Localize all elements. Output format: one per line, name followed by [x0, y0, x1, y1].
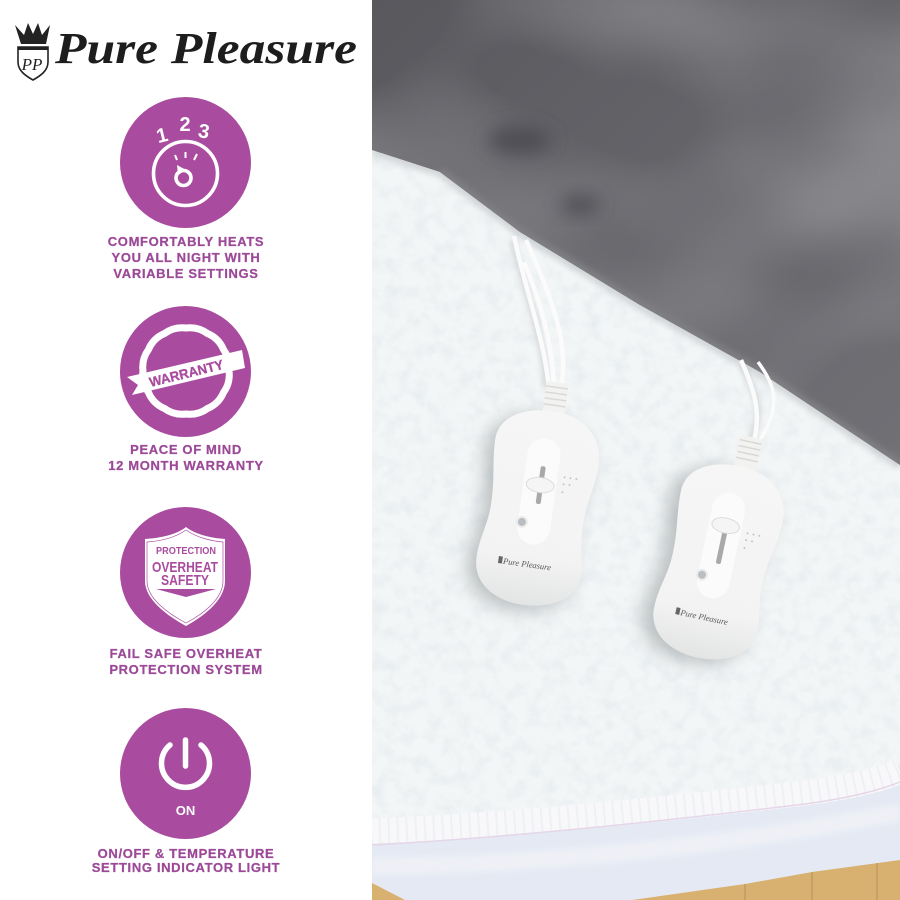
- icon: heat settings dial: 1: [154, 124, 170, 148]
- caption: indicator light: ON/OFF & TEMPERATURE: [98, 846, 274, 861]
- icon: shield: [18, 47, 48, 80]
- grey velvet blanket: [372, 0, 900, 470]
- icon: shield: PP: [21, 55, 42, 74]
- icon: heat settings dial: [120, 97, 251, 228]
- photo: heated blanket with two controllers: [372, 0, 900, 900]
- icon: heat settings dial: 3: [196, 120, 211, 144]
- icon: overheat protection shield: PROTECTION: [156, 546, 216, 557]
- controller: right: Pure Pleasure: [679, 607, 729, 627]
- icon: overheat protection shield: [120, 507, 251, 638]
- caption: variable settings: [108, 234, 264, 281]
- logo: crest and wordmark: [15, 23, 357, 81]
- caption: variable settings: COMFORTABLY HEATS: [108, 234, 264, 249]
- controller: left: [462, 374, 609, 619]
- strain relief: [734, 435, 762, 471]
- icon: heat settings dial: 2: [179, 114, 191, 136]
- cords: [512, 236, 774, 440]
- controller: left: Pure Pleasure: [502, 556, 552, 572]
- icon: power button: ON: [176, 803, 195, 818]
- icon: crown: [15, 23, 50, 44]
- caption: variable settings: VARIABLE SETTINGS: [113, 266, 259, 281]
- caption: indicator light: SETTING INDICATOR LIGHT: [92, 860, 280, 875]
- icon: overheat protection shield: SAFETY: [161, 572, 209, 589]
- controller: right: [635, 423, 799, 675]
- wooden floor: [372, 860, 900, 900]
- blanket hem and underside: [372, 765, 900, 900]
- caption: indicator light: [92, 846, 280, 875]
- caption: overheat protection: [109, 646, 263, 677]
- caption: variable settings: YOU ALL NIGHT WITH: [112, 250, 260, 265]
- caption: warranty: PEACE OF MIND: [130, 442, 242, 457]
- icon: power button: [120, 708, 251, 839]
- icon: warranty seal: [120, 306, 251, 437]
- strain relief: [542, 381, 569, 416]
- caption: warranty: 12 MONTH WARRANTY: [108, 458, 264, 473]
- caption: overheat protection: FAIL SAFE OVERHEAT: [110, 646, 262, 661]
- wordmark: Pure Pleasure: [54, 24, 357, 73]
- icon: overheat protection shield: OVERHEAT: [152, 559, 218, 576]
- sheepskin fleece: [372, 150, 900, 818]
- caption: warranty: [108, 442, 264, 473]
- caption: overheat protection: PROTECTION SYSTEM: [109, 662, 263, 677]
- icon: warranty seal: WARRANTY: [148, 357, 225, 390]
